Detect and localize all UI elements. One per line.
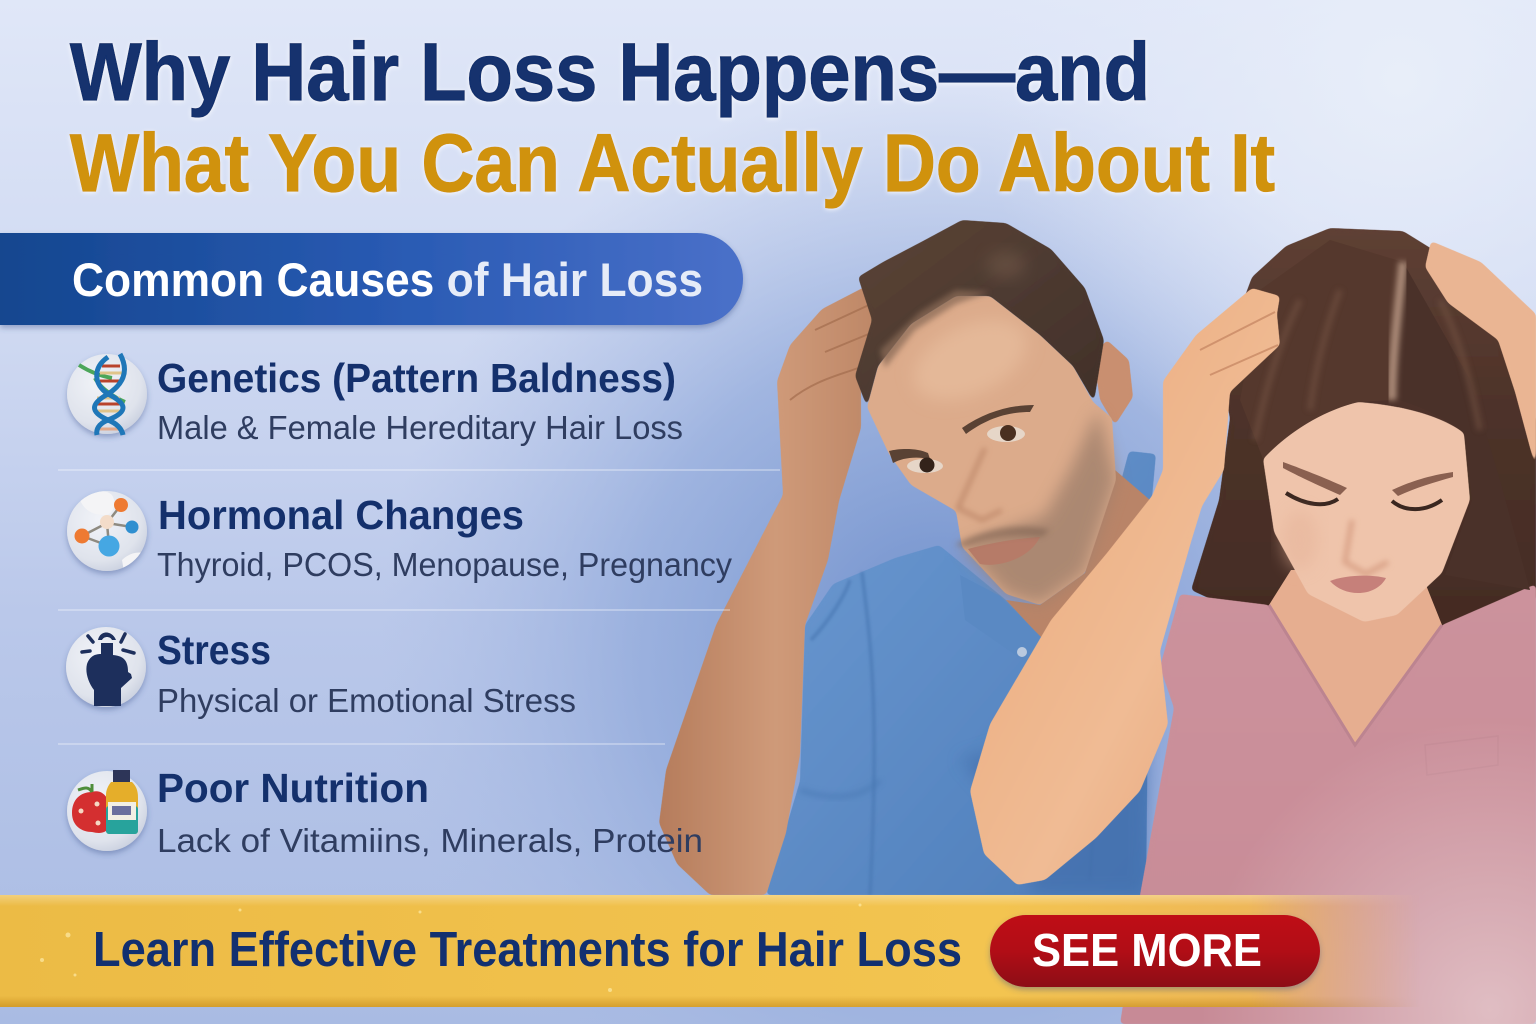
see more button [990, 915, 1320, 987]
panel: common causes header [0, 233, 743, 325]
woman's arm and hand [970, 288, 1280, 885]
item: poor nutrition [67, 765, 703, 859]
man's thinning hair patch [880, 290, 990, 368]
icon: dna [67, 354, 147, 435]
man's shirt [766, 451, 1156, 895]
title line 2: What You Can Actually Do About It [70, 118, 1275, 209]
see more button: SEE MORE [1032, 924, 1262, 976]
header text: Common Causes of Hair Loss [72, 253, 703, 306]
hormonal heading: Hormonal Changes [158, 492, 524, 538]
nutrition text: Lack of Vitamiins, Minerals, Protein [157, 822, 703, 859]
genetics heading: Genetics (Pattern Baldness) [157, 355, 676, 401]
photo: man holding receding hairline [659, 220, 1156, 895]
banner background [0, 895, 1420, 1007]
title [70, 27, 1275, 209]
man's ear [1093, 340, 1133, 425]
banner text: Learn Effective Treatments for Hair Loss [93, 923, 962, 977]
icon: apple and bottle [67, 770, 147, 851]
woman's hair front [1240, 240, 1530, 590]
stress text: Physical or Emotional Stress [157, 682, 576, 719]
woman's shirt fade [1200, 720, 1536, 1024]
woman's neckline and pocket [1269, 605, 1498, 775]
icon: stressed hand [66, 627, 146, 707]
stress heading: Stress [157, 627, 271, 673]
genetics text: Male & Female Hereditary Hair Loss [157, 409, 683, 446]
hormonal text: Thyroid, PCOS, Menopause, Pregnancy [157, 546, 732, 583]
nutrition heading: Poor Nutrition [157, 765, 429, 811]
man's crown whorl [986, 251, 1026, 279]
woman's neck and chest [1269, 570, 1442, 745]
man's hand fingers shading [790, 298, 888, 400]
woman's hair back [1191, 228, 1536, 640]
woman's finger lines [1200, 312, 1278, 375]
woman's pink top [1120, 584, 1536, 1024]
call to action banner [0, 895, 1420, 1007]
man's shirt collar and button [960, 575, 1045, 665]
woman's face details [1282, 462, 1453, 593]
man's forearm and hand [659, 280, 892, 895]
man's face [867, 296, 1116, 605]
photo: woman holding parted hair [970, 228, 1536, 1024]
man's hair [855, 220, 1104, 407]
man's neck [1006, 470, 1150, 642]
man's eyes, brows, mouth [889, 405, 1050, 565]
man's stubble [962, 410, 1116, 605]
title line 1: Why Hair Loss Happens—and [70, 27, 1150, 118]
man's forehead highlight [901, 304, 1039, 416]
panel: causes list [58, 354, 780, 859]
item: stress [66, 627, 576, 719]
woman's face [1263, 402, 1470, 622]
woman's right hand [1425, 241, 1536, 470]
item: genetics [67, 354, 683, 446]
icon: molecules [67, 491, 150, 574]
item: hormonal changes [67, 491, 732, 583]
